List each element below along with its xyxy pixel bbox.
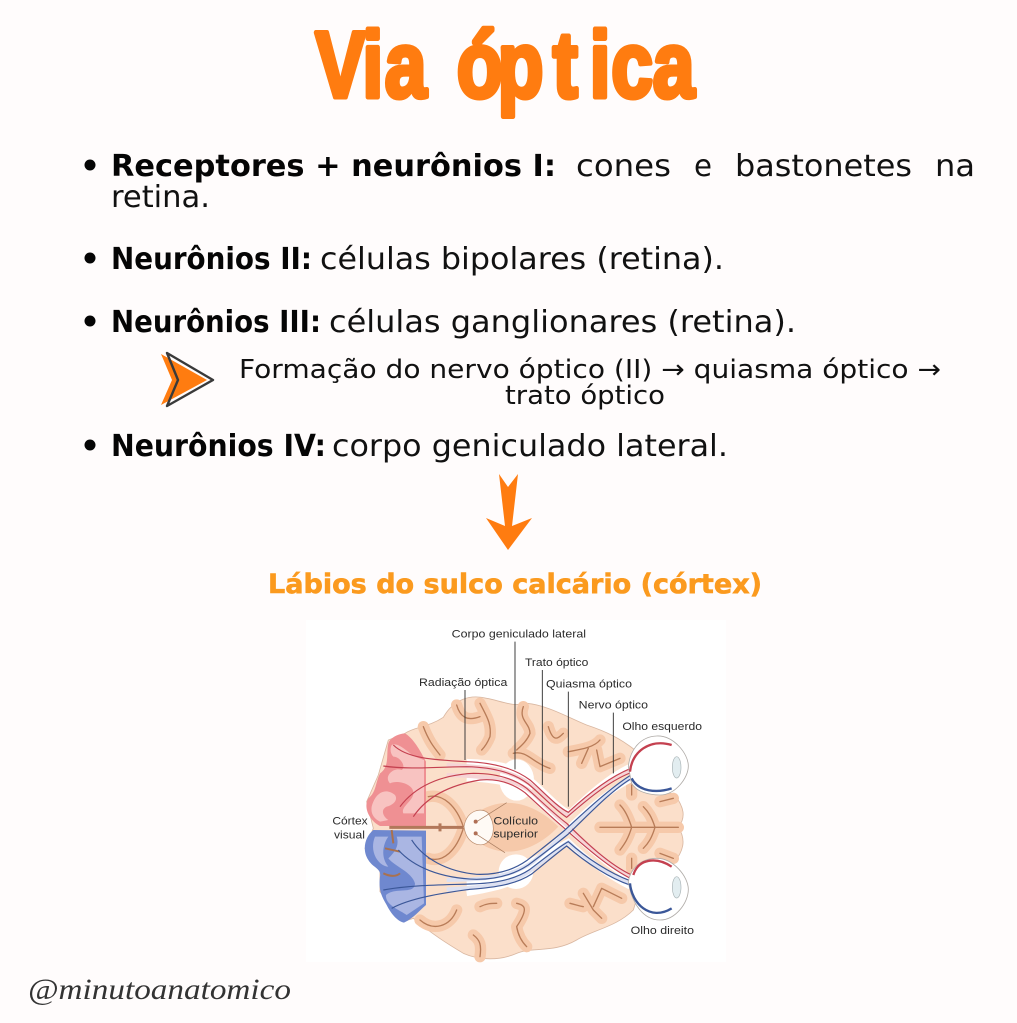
diagram labels: Corpo geniculado lateral xyxy=(452,629,586,641)
bullet: receptores: Receptores + neurônios I: xyxy=(111,149,556,184)
icon: right eye xyxy=(628,858,688,920)
blue fibres xyxy=(383,776,630,908)
colliculi xyxy=(474,803,507,853)
bullet: neurônios IV: corpo geniculado lateral. xyxy=(332,429,728,464)
arrow: down xyxy=(486,474,532,550)
bullet: neurônios II: células bipolares (retina). xyxy=(320,242,724,277)
red fibres xyxy=(383,745,632,879)
diagram labels xyxy=(332,629,702,937)
heading: lábios do sulco calcário: Lábios do sulco calcário (córtex) xyxy=(268,569,762,600)
bullet: neurônios IV xyxy=(84,429,728,464)
bullet list xyxy=(84,149,975,464)
diagram labels: Trato óptico xyxy=(525,657,588,669)
bundle casing xyxy=(467,762,632,893)
visual cortex: red xyxy=(366,733,426,826)
bullet: receptores: retina. xyxy=(111,180,210,215)
text: formação do nervo óptico: Formação do nervo óptico (II) → quiasma óptico → xyxy=(239,355,941,385)
bullet: neurônios III xyxy=(84,305,796,340)
bullet: neurônios IV: Neurônios IV: xyxy=(111,429,326,464)
optic pathways xyxy=(383,745,632,908)
diagram labels: visual xyxy=(334,830,365,842)
icon: left eye xyxy=(628,736,688,795)
title: Via óptica xyxy=(315,13,695,118)
diagram labels: Nervo óptico xyxy=(579,700,648,712)
brain xyxy=(365,697,683,959)
bullet: receptores: bastonetes xyxy=(735,149,912,184)
diagram labels: Radiação óptica xyxy=(419,677,508,689)
bullet: neurônios III: Neurônios III: xyxy=(111,305,321,340)
leader lines xyxy=(465,642,613,807)
midline fissure xyxy=(389,823,463,831)
bullet: receptores: na xyxy=(935,149,975,184)
visual cortex: blue xyxy=(365,830,426,923)
bullet: neurônios II: Neurônios II: xyxy=(111,242,312,277)
diagram labels: Quiasma óptico xyxy=(546,679,632,691)
text: formação do nervo óptico: trato óptico xyxy=(505,381,665,411)
colliculus oval xyxy=(464,810,493,845)
bullet: receptores: cones xyxy=(576,149,671,184)
diagram labels: Olho direito xyxy=(631,925,694,937)
lateral geniculate bodies xyxy=(499,759,534,801)
bullet: neurônios III: células ganglionares (retina). xyxy=(329,305,796,340)
panel: optic pathway diagram xyxy=(306,620,726,962)
bullet: neurônios II xyxy=(84,242,724,277)
diagram labels: superior xyxy=(493,828,538,840)
signature: @minutoanatomico xyxy=(28,973,291,1006)
bullet: receptores xyxy=(84,149,975,215)
icon: chevron arrow xyxy=(161,353,213,406)
diagram labels: Olho esquerdo xyxy=(622,721,702,733)
diagram labels: Córtex xyxy=(332,815,368,827)
sulcus halos xyxy=(420,703,678,957)
diagram labels: Colículo xyxy=(493,815,538,827)
bullet: receptores: e xyxy=(694,149,712,184)
sulci xyxy=(420,703,678,957)
text: formação do nervo óptico xyxy=(239,355,941,411)
